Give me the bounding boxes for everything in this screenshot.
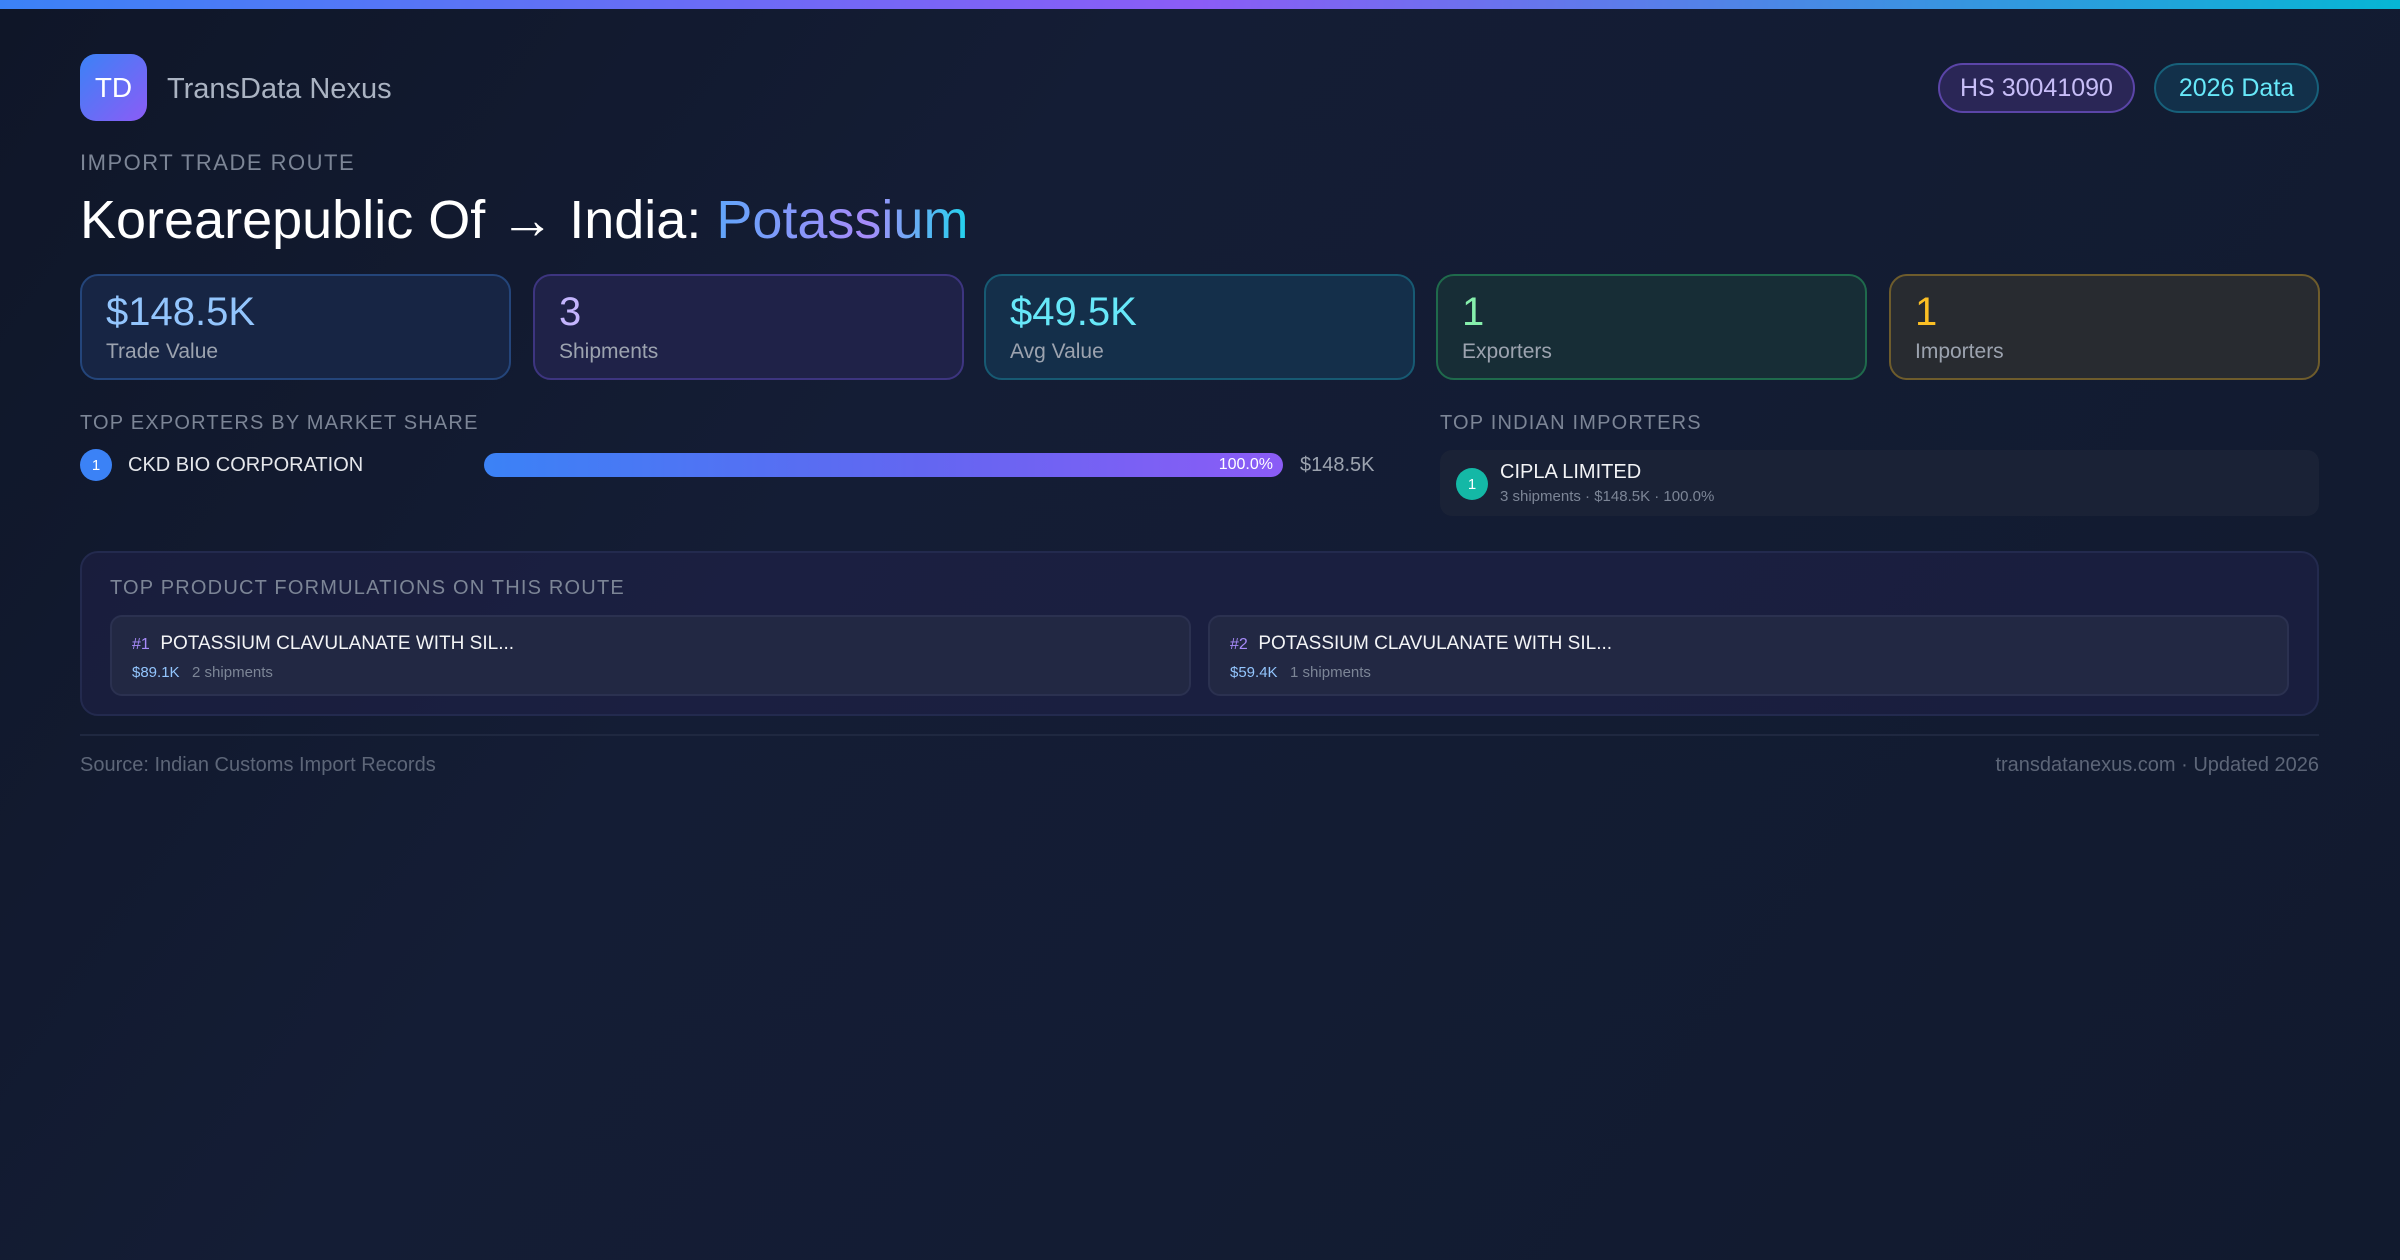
rank badge: 1 [92,456,100,474]
importer details: 3 shipments · $148.5K · 100.0% [1500,488,1714,505]
importer rank badge: 1 [1468,476,1476,492]
stat card: shipments: Shipments [559,340,658,363]
formulation card 1: $89.1K 2 shipments [132,664,273,681]
formulation card 1 [110,615,1191,696]
top gradient bar [0,0,2400,9]
pill: HS code: HS 30041090 [1960,74,2113,102]
stat card: exporters: Exporters [1462,340,1552,363]
rank badge [80,449,112,481]
share bar: 100.0% [1219,456,1273,473]
stat card: avg value [984,274,1415,380]
stat card: importers: 1 [1915,290,1937,334]
heading: top exporters: TOP EXPORTERS BY MARKET SHARE [80,412,479,434]
formulation card 2: $59.4K 1 shipments [1230,664,1371,681]
stat card: avg value: $49.5K [1010,290,1137,334]
brand name: TransData Nexus [167,73,392,105]
importer rank badge [1456,468,1488,500]
exporter name: CKD BIO CORPORATION [128,454,363,476]
footer site: transdatanexus.com · Updated 2026 [1995,754,2319,776]
stat card: trade value: $148.5K [106,290,255,334]
pill: year: 2026 Data [2179,74,2294,102]
share bar [484,453,1283,477]
exporter value: $148.5K [1300,454,1375,476]
pill: HS code [1938,63,2135,113]
stat card: trade value: Trade Value [106,340,218,363]
stat card: trade value [80,274,511,380]
logo [80,54,147,121]
title: Korearepublic Of → India: Potassium [80,190,968,250]
logo: TD [95,72,132,102]
importer name: CIPLA LIMITED [1500,461,1641,483]
stat card: importers: Importers [1915,340,2004,363]
stat card: shipments [533,274,964,380]
pill: year [2154,63,2319,113]
formulation card 2 [1208,615,2289,696]
heading: top importers: TOP INDIAN IMPORTERS [1440,412,1702,434]
panel heading: TOP PRODUCT FORMULATIONS ON THIS ROUTE [110,577,625,599]
stat card: avg value: Avg Value [1010,340,1104,363]
stat card: exporters [1436,274,1867,380]
formulation card 2: #2 POTASSIUM CLAVULANATE WITH SIL... [1230,633,1612,654]
importer card [1440,450,2319,516]
panel: product formulations [80,551,2319,716]
stat card: importers [1889,274,2320,380]
stat card: shipments: 3 [559,290,581,334]
kicker: IMPORT TRADE ROUTE [80,150,355,175]
exporter row [80,449,1375,481]
formulation card 1: #1 POTASSIUM CLAVULANATE WITH SIL... [132,633,514,654]
footer source: Source: Indian Customs Import Records [80,754,436,776]
stat card: exporters: 1 [1462,290,1484,334]
